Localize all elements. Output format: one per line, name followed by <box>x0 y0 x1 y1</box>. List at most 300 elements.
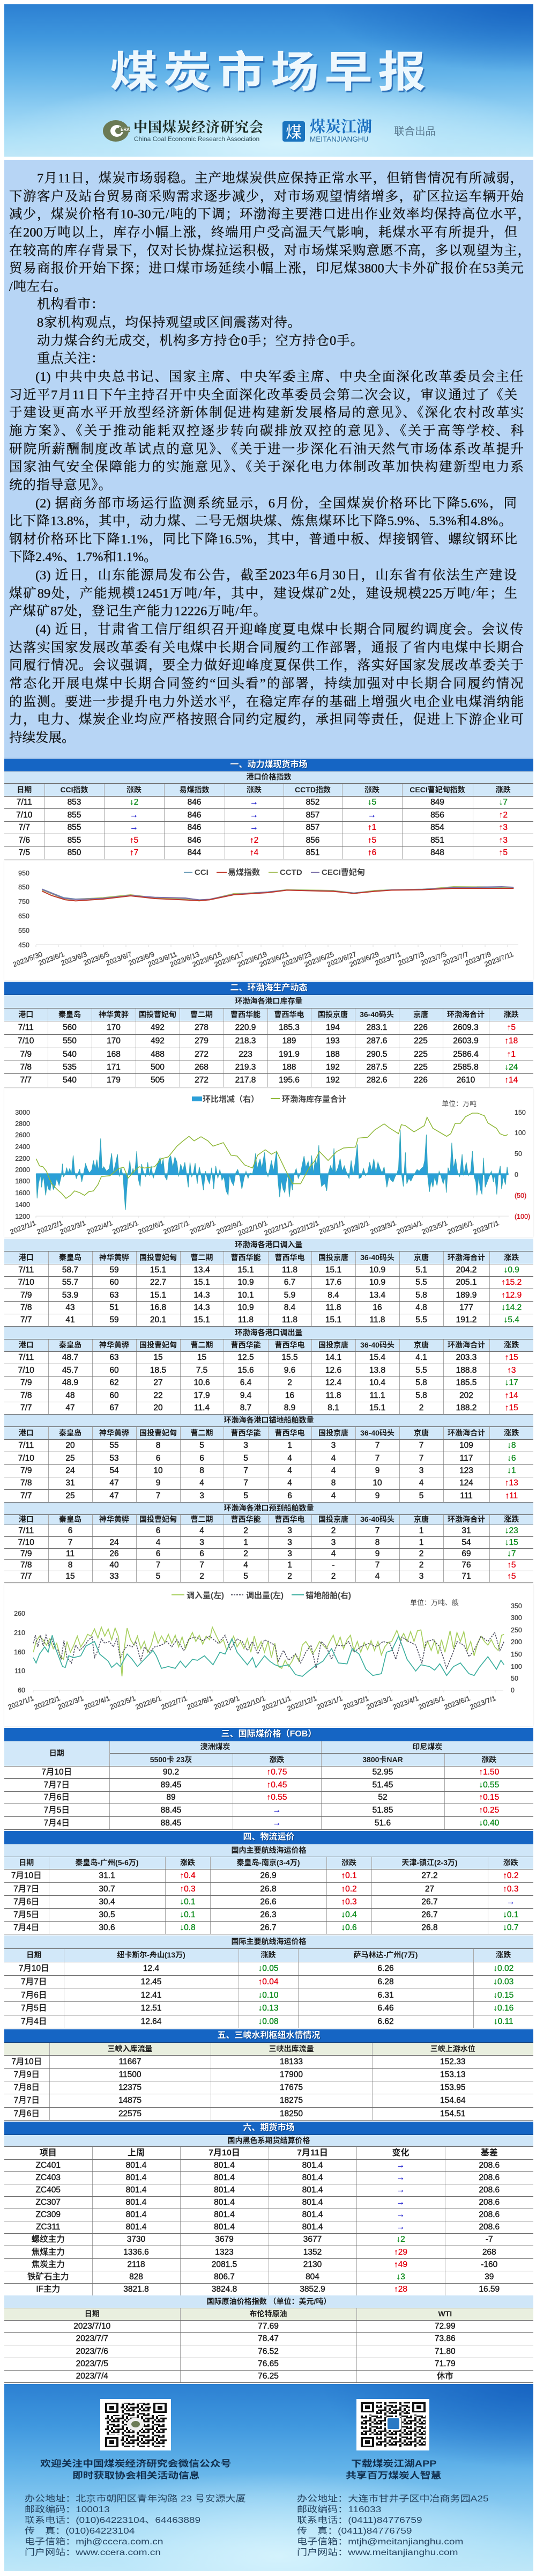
table: section 4 domestic freight rates: 涨跌 <box>180 1858 195 1867</box>
table: section 6 futures market settlement prices: 801.4 <box>126 2222 146 2232</box>
x axis date labels: 2023/6/19 <box>236 950 268 969</box>
table: section 4 domestic freight rates: ↑0.3 <box>503 1884 518 1894</box>
table: section 4 domestic freight rates: ↓0.1 <box>503 1910 518 1919</box>
y axis labels: 550 <box>18 927 29 934</box>
table: Bohai port inflow, outflow, anchored and expected ships: 3 <box>419 1572 423 1581</box>
x axis date labels: 2023/7/7 <box>441 950 470 967</box>
table: section 4 domestic freight rates: 7月6日 <box>13 1897 39 1907</box>
table: Bohai port inflow, outflow, anchored and expected ships: 4 <box>331 1549 336 1558</box>
right y axis labels: 100 <box>515 1129 526 1137</box>
table: section 2 Bohai port inventory: 36-40码头 <box>360 1010 394 1018</box>
x axis date labels: 2022/1/1 <box>6 1694 35 1711</box>
table: section 6 futures market settlement prices: 801.4 <box>126 2173 146 2182</box>
table: Bohai port inflow, outflow, anchored and expected ships: 4 <box>331 1466 336 1475</box>
table: section 1 thermal coal port price index: ↑3 <box>499 823 508 832</box>
table: section 6 futures market settlement prices: 铁矿石主力 <box>27 2272 69 2281</box>
table: section 1 thermal coal port price index: 852 <box>306 798 319 807</box>
table: section 4 domestic freight rates: ↑0.2 <box>503 1871 518 1880</box>
paragraph: key focus 2: 下降2.4%、1.7%和1.1%。 <box>9 550 157 564</box>
x axis date labels: 2022/6/1 <box>134 1694 162 1711</box>
table: Bohai port inflow, outflow, anchored and expected ships: 12.6 <box>325 1366 341 1374</box>
x axis date labels: 2022/10/1 <box>237 1219 269 1238</box>
table: Bohai port inflow, outflow, anchored and expected ships: 2 <box>199 1572 204 1581</box>
left y axis labels: 2200 <box>15 1155 30 1162</box>
table: section 2 Bohai port inventory: 2585.8 <box>453 1062 479 1072</box>
table: section 5 Three Gorges water conditions: 152.33 <box>440 2057 465 2066</box>
paragraph: institutional views: 8家机构观点，均保持观望或区间震荡对待。 <box>37 315 301 330</box>
table: section 6 futures market settlement prices: → <box>397 2198 405 2207</box>
table: section 4 domestic freight rates: 26.8 <box>421 1923 438 1932</box>
table: Bohai port inflow, outflow, anchored and expected ships: 2 <box>287 1378 292 1387</box>
table: Bohai port inflow, outflow, anchored and expected ships: 123 <box>459 1466 473 1475</box>
table: section 6 futures market settlement prices: ↑29 <box>394 2248 407 2256</box>
table: section 6 futures market settlement prices: ZC405 <box>35 2185 61 2195</box>
panel: market summary text <box>4 160 533 758</box>
table: section 1 thermal coal port price index: ↓5 <box>368 798 376 807</box>
table: international freight rates: ↓0.05 <box>258 1964 278 1973</box>
table: Bohai port inflow, outflow, anchored and expected ships: 曹西华电 <box>274 1515 304 1523</box>
table: Bohai port inflow, outflow, anchored and expected ships: 18.5 <box>150 1366 166 1374</box>
table: section 2 Bohai port inventory: 290.5 <box>367 1049 387 1059</box>
contact details: Meitan Jianghu: 办公地址：大连市甘井子区中冶商务园A25 <box>297 2494 489 2504</box>
table: Bohai port inflow, outflow, anchored and expected ships: 11.8 <box>238 1315 254 1324</box>
table: section 6 futures market settlement prices: ↓2 <box>396 2235 405 2244</box>
table: Bohai port inflow, outflow, anchored and expected ships: 5.5 <box>415 1315 427 1324</box>
left y axis labels <box>15 1109 30 1220</box>
table: Bohai port inflow, outflow, anchored and expected ships: 7 <box>419 1454 423 1462</box>
unit label: 单位：万吨、艘 <box>410 1599 459 1607</box>
table: Bohai port inflow, outflow, anchored and expected ships: 7/10 <box>18 1366 34 1374</box>
table: Bohai port inflow, outflow, anchored and expected ships: 曹二期 <box>191 1428 213 1437</box>
table: Bohai port inflow, outflow, anchored and expected ships: 神华黄骅 <box>99 1341 129 1349</box>
table: section 2 Bohai port inventory: 秦皇岛 <box>58 1010 81 1018</box>
table: international crude oil price index: WTI <box>438 2309 452 2318</box>
table: section 6 futures market settlement prices: 828 <box>129 2272 143 2281</box>
table: Bohai port inflow, outflow, anchored and expected ships: ↓7 <box>507 1549 516 1558</box>
table: Bohai port inflow, outflow, anchored and expected ships: 5 <box>243 1572 248 1581</box>
table: Bohai port inflow, outflow, anchored and expected ships: 36-40码头 <box>360 1253 394 1262</box>
table: Bohai port inflow, outflow, anchored and expected ships: 25 <box>65 1491 75 1500</box>
table: Bohai port inflow, outflow, anchored and expected ships: 9 <box>375 1549 379 1558</box>
table: section 2 Bohai port inventory: 272 <box>195 1076 209 1085</box>
left y axis labels: 60 <box>18 1687 25 1694</box>
table: section 4 domestic freight rates: 30.6 <box>99 1923 115 1932</box>
paragraph: market overview: 在200万吨以上，库存小幅上涨，终端用户受高温天气影响，耗煤水平有所提升，但 <box>9 225 517 240</box>
table: international crude oil price index: 76.65 <box>258 2359 279 2368</box>
table: section 6 futures market settlement prices: 801.4 <box>302 2161 323 2169</box>
x axis date labels: 2023/7/11 <box>483 950 515 968</box>
table: Bohai port inflow, outflow, anchored and expected ships: 环渤海各港口调出量 <box>235 1328 302 1337</box>
right y axis labels <box>511 1602 522 1694</box>
table: Bohai port inflow, outflow, anchored and expected ships: 31 <box>461 1526 471 1535</box>
table: section 6 futures market settlement prices: 上周 <box>128 2148 145 2158</box>
table: section 4 domestic freight rates: ↓0.8 <box>180 1923 196 1932</box>
table: Bohai port inflow, outflow, anchored and expected ships: 5.1 <box>415 1265 427 1275</box>
table: section 2 Bohai port inventory: 192 <box>326 1062 340 1072</box>
paragraph: key focus 4: (4) 近日，甘肃省工信厅组织召开迎峰度夏电煤中长期合同履约调度会。会议传 <box>35 622 523 637</box>
table: section 2 Bohai port inventory <box>4 982 533 1087</box>
table: Bohai port inflow, outflow, anchored and expected ships: 22 <box>153 1390 163 1400</box>
table: Bohai port inflow, outflow, anchored and expected ships: 6 <box>68 1526 72 1535</box>
table: section 2 Bohai port inventory: 226 <box>414 1076 428 1085</box>
table: Bohai port inflow, outflow, anchored and expected ships: 国投京唐 <box>318 1515 348 1523</box>
table: international freight rates: ↓0.10 <box>258 1990 278 2000</box>
table: section 3 international coal price FOB: 7月5日 <box>44 1806 70 1814</box>
table: section 1 thermal coal port price index: 853 <box>68 798 81 807</box>
table: Bohai port inflow, outflow, anchored and expected ships: 6 <box>199 1454 204 1462</box>
table: Bohai port inflow, outflow, anchored and expected ships: 189.9 <box>456 1291 477 1299</box>
table: section 2 Bohai port inventory: 2586.4 <box>453 1049 479 1059</box>
table: Bohai port inflow, outflow, anchored and expected ships: 55 <box>109 1441 119 1450</box>
table: international freight rates: 7月6日 <box>21 1990 47 2000</box>
table: section 1 thermal coal port price index: → <box>250 798 258 807</box>
table: Bohai port inflow, outflow, anchored and expected ships: 10.9 <box>237 1303 254 1312</box>
table: section 4 domestic freight rates: 26.3 <box>260 1910 277 1919</box>
paragraph: key focus 1: 研院所薪酬制度改革试点的意见》、《关于进一步深化石油天然气市场体系改革提升 <box>9 442 524 457</box>
table: section 4 domestic freight rates: 天津-镇江(2-3万) <box>401 1858 458 1867</box>
table: Bohai port inflow, outflow, anchored and expected ships: 曹西华能 <box>230 1428 260 1437</box>
table: Bohai port inflow, outflow, anchored and expected ships: 10.9 <box>369 1265 385 1275</box>
table: Bohai port inflow, outflow, anchored and expected ships: 神华黄骅 <box>99 1515 129 1523</box>
table: section 3 international coal price FOB: 三、国际煤价格（FOB） <box>221 1729 316 1739</box>
table: Bohai port inflow, outflow, anchored and expected ships: 7/7 <box>20 1315 32 1324</box>
table: international freight rates: ↑0.04 <box>258 1977 278 1986</box>
table: Bohai port inflow, outflow, anchored and expected ships: 17.6 <box>325 1278 341 1287</box>
y axis labels: 950 <box>18 870 29 877</box>
table: Bohai port inflow, outflow, anchored and expected ships: 3 <box>287 1537 292 1547</box>
table: Bohai port inflow, outflow, anchored and expected ships: 7/10 <box>18 1537 34 1547</box>
table: section 6 futures market settlement prices: 268 <box>482 2248 496 2256</box>
table: Bohai port inflow, outflow, anchored and expected ships: 15.1 <box>237 1265 254 1275</box>
table: Bohai port inflow, outflow, anchored and expected ships: 31 <box>65 1478 75 1488</box>
table: Bohai port inflow, outflow, anchored and expected ships: 4 <box>243 1561 248 1570</box>
table: section 6 futures market settlement prices: → <box>397 2185 405 2195</box>
table: section 2 Bohai port inventory: 550 <box>63 1036 77 1046</box>
table: section 2 Bohai port inventory: 560 <box>63 1023 77 1032</box>
table: Bohai port inflow, outflow, anchored and expected ships: 47 <box>109 1478 119 1488</box>
table: section 1 thermal coal port price index: 涨跌 <box>364 785 379 794</box>
table: Bohai port inflow, outflow, anchored and expected ships: 8 <box>375 1537 379 1547</box>
footer message: CCERA: 欢迎关注中国煤炭经济研究会微信公众号 <box>40 2459 231 2469</box>
x axis date labels: 2022/2/1 <box>35 1219 64 1236</box>
table: Bohai port inflow, outflow, anchored and expected ships: 7/10 <box>18 1278 34 1287</box>
table: Bohai port inflow, outflow, anchored and expected ships: 17.9 <box>193 1390 210 1400</box>
table: international freight rates: 12.64 <box>141 2017 161 2026</box>
contact details: Meitan Jianghu <box>297 2494 489 2557</box>
daily change area and inventory line <box>36 1113 509 1210</box>
table: section 3 international coal price FOB: 日期 <box>49 1749 64 1757</box>
table: Bohai port inflow, outflow, anchored and expected ships: 58.7 <box>62 1265 78 1275</box>
table: Bohai port inflow, outflow, anchored and expected ships: 曹西华能 <box>230 1253 260 1262</box>
table: section 4 domestic freight rates: → <box>507 1897 515 1907</box>
table: Bohai port inflow, outflow, anchored and expected ships: 7/9 <box>20 1378 32 1387</box>
paragraph: key focus 3: (3) 近日，山东能源局发布公告，截至2023年6月30日，山东省有依法生产建设 <box>35 568 517 583</box>
paragraph: market overview <box>9 171 531 294</box>
table: Bohai port inflow, outflow, anchored and expected ships: 4 <box>331 1454 336 1462</box>
table: Bohai port inflow, outflow, anchored and expected ships: 20 <box>65 1441 75 1450</box>
table: section 2 Bohai port inventory: 540 <box>63 1049 77 1059</box>
contact details: CCERA: 门户网站：www.ccera.com.cn <box>25 2548 161 2557</box>
chart legend: CCTD <box>280 868 302 877</box>
table: section 1 thermal coal port price index: 857 <box>306 823 319 832</box>
table: Bohai port inflow, outflow, anchored and expected ships: 5.8 <box>415 1291 427 1299</box>
table: section 6 futures market settlement prices: → <box>397 2210 405 2219</box>
table: section 3 international coal price FOB: 90.2 <box>163 1768 179 1777</box>
x axis date labels: 2023/1/1 <box>317 1219 346 1236</box>
table: Bohai port inflow, outflow, anchored and expected ships: 涨跌 <box>504 1253 519 1262</box>
x axis date labels: 2022/8/1 <box>185 1694 214 1711</box>
table: international crude oil price index: 73.86 <box>435 2334 456 2343</box>
table: section 6 futures market settlement prices: 2081.5 <box>212 2260 237 2269</box>
table: section 6 futures market settlement prices: IF主力 <box>36 2285 60 2294</box>
table: Bohai port inflow, outflow, anchored and expected ships: 8.1 <box>327 1403 339 1412</box>
x axis date labels: 2022/11/1 <box>261 1694 292 1712</box>
table: Bohai port inflow, outflow, anchored and expected ships: 10 <box>153 1466 163 1475</box>
table: Bohai port inflow, outflow, anchored and expected ships: 4 <box>287 1478 292 1488</box>
table: section 6 futures market settlement prices: 801.4 <box>302 2222 323 2232</box>
table: Bohai port inflow, outflow, anchored and expected ships: 秦皇岛 <box>59 1341 81 1349</box>
table: section 3 international coal price FOB: ↓0.55 <box>479 1780 499 1790</box>
table: section 5 Three Gorges water conditions: 153.95 <box>440 2082 465 2092</box>
unit label: 单位：万吨 <box>442 1100 477 1108</box>
table: section 2 Bohai port inventory: 7/7 <box>20 1076 32 1085</box>
table: section 2 Bohai port inventory: 195.6 <box>279 1076 300 1085</box>
y axis labels: 850 <box>18 884 29 891</box>
chart legend: 易煤指数 <box>228 867 260 877</box>
title: 煤炭市场早报 <box>110 38 431 100</box>
table: section 1 thermal coal port price index: 851 <box>306 848 319 857</box>
table: Bohai port inflow, outflow, anchored and expected ships: 10.6 <box>193 1378 210 1387</box>
inflow, outflow and anchored ship lines <box>33 1627 504 1676</box>
table: international freight rates: ↓0.16 <box>493 2004 513 2013</box>
table: section 3 international coal price FOB: 89.45 <box>161 1780 181 1790</box>
right y axis labels: 250 <box>511 1626 522 1634</box>
left y axis labels: 1200 <box>15 1213 30 1220</box>
x axis date labels <box>12 950 515 969</box>
table: Bohai port inflow, outflow, anchored and expected ships: 环渤海各港口预到船舶数量 <box>224 1504 314 1512</box>
table: section 1 thermal coal port price index: CECI曹妃甸指数 <box>410 785 465 794</box>
table: section 4 domestic freight rates: 30.7 <box>99 1884 115 1894</box>
table: Bohai port inflow, outflow, anchored and expected ships: 15.1 <box>150 1291 166 1299</box>
table: section 1 thermal coal port price index: ↑5 <box>499 848 508 857</box>
table: Bohai port inflow, outflow, anchored and expected ships: 5 <box>419 1491 423 1500</box>
table: Bohai port inflow, outflow, anchored and expected ships: 5 <box>156 1572 160 1581</box>
table: international freight rates: ↓0.03 <box>493 1977 513 1986</box>
table: section 2 Bohai port inventory: 500 <box>151 1062 165 1072</box>
x axis date labels: 2023/6/1 <box>443 1694 471 1711</box>
table: section 6 futures market settlement prices: ZC311 <box>36 2222 60 2232</box>
table: section 4 domestic freight rates: 涨跌 <box>503 1858 518 1867</box>
table: Bohai port inflow, outflow, anchored and expected ships: 2 <box>243 1549 248 1558</box>
y axis labels: 750 <box>18 898 29 906</box>
x axis date labels: 2022/5/1 <box>108 1694 137 1711</box>
table: international freight rates: 12.4 <box>143 1964 159 1973</box>
table: Bohai port inflow, outflow, anchored and expected ships: 59 <box>109 1315 119 1324</box>
table: Bohai port inflow, outflow, anchored and expected ships: 7 <box>156 1491 160 1500</box>
table: section 5 Three Gorges water conditions: 18133 <box>280 2057 303 2066</box>
x axis date labels: 2023/3/1 <box>365 1694 393 1711</box>
table: Bohai port inflow, outflow, anchored and expected ships: 4 <box>287 1466 292 1475</box>
table: section 2 Bohai port inventory: 218.3 <box>235 1036 256 1046</box>
table: Bohai port inflow, outflow, anchored and expected ships: 5.8 <box>415 1378 427 1387</box>
paragraph: market overview: 下游客户及站台贸易商采购需求逐步减少，对市场观望情绪增多，矿区拉运车辆开始 <box>9 189 524 204</box>
left y axis labels: 160 <box>14 1648 25 1656</box>
table: section 2 Bohai port inventory: 二、环渤海生产动态 <box>230 983 308 992</box>
logo: China Coal Economic Research Association: 中国煤炭经济研究会 <box>133 120 264 135</box>
table: section 1 thermal coal port price index: CCI指数 <box>60 785 88 794</box>
table: Bohai port inflow, outflow, anchored and expected ships: 涨跌 <box>504 1341 519 1349</box>
table: section 6 futures market settlement prices: 208.6 <box>479 2210 500 2219</box>
table: Bohai port inflow, outflow, anchored and expected ships: 188.8 <box>456 1366 477 1374</box>
table: section 6 futures market settlement prices: 806.7 <box>214 2272 235 2281</box>
table: section 3 international coal price FOB: ↑0.55 <box>267 1793 287 1802</box>
table: Bohai port inflow, outflow, anchored and expected ships: 13.4 <box>193 1265 210 1275</box>
table: section 3 international coal price FOB: ↑1.50 <box>479 1768 499 1777</box>
contact details: CCERA: 传 真：(010)64223104 <box>25 2527 135 2536</box>
table: section 2 Bohai port inventory: 488 <box>151 1049 165 1059</box>
x axis date labels: 2023/6/23 <box>281 950 312 969</box>
table: Bohai port inflow, outflow, anchored and expected ships: 22.7 <box>150 1278 166 1287</box>
table: section 1 thermal coal port price index: ↑3 <box>499 836 508 844</box>
table: international crude oil price index: 76.52 <box>258 2346 279 2356</box>
table: Bohai port inflow, outflow, anchored and expected ships: 6 <box>156 1454 160 1462</box>
table: international freight rates: 12.41 <box>141 1990 161 2000</box>
table: Bohai port inflow, outflow, anchored and expected ships: 191.2 <box>456 1315 477 1324</box>
footer message: Meitan Jianghu <box>346 2459 441 2481</box>
table: section 6 futures market settlement prices: 变化 <box>392 2148 410 2158</box>
table: section 3 international coal price FOB: 涨跌 <box>269 1755 284 1764</box>
table: section 6 futures market settlement prices: 801.4 <box>126 2161 146 2169</box>
table: Bohai port inflow, outflow, anchored and expected ships: 24 <box>65 1466 75 1475</box>
table: Bohai port inflow, outflow, anchored and expected ships: 4 <box>199 1526 204 1535</box>
table: international freight rates: 萨马林达-广州(7万) <box>354 1951 418 1959</box>
table: section 1 thermal coal port price index: 7/7 <box>18 823 30 832</box>
table: Bohai port inflow, outflow, anchored and expected ships: 27 <box>153 1378 163 1387</box>
table: section 4 domestic freight rates: ↓0.4 <box>341 1910 357 1919</box>
table: section 2 Bohai port inventory: 226 <box>414 1023 428 1032</box>
table: section 6 futures market settlement prices: 801.4 <box>302 2173 323 2182</box>
table: section 3 international coal price FOB: ↑0.25 <box>479 1806 499 1814</box>
table: Bohai port inflow, outflow, anchored and expected ships: 3 <box>199 1491 204 1500</box>
x axis date labels: 2023/6/11 <box>147 950 178 968</box>
table: Bohai port inflow, outflow, anchored and expected ships: 11.4 <box>194 1403 210 1412</box>
table: section 6 futures market settlement prices: 3852.9 <box>300 2285 325 2294</box>
table: Bohai port inflow, outflow, anchored and expected ships: 9 <box>375 1466 379 1475</box>
paragraph: key focus 2: 比下降13.8%，其中，动力煤、二号无烟块煤、炼焦煤环比下降5.9%、5.3%和4.8%。 <box>9 514 512 528</box>
table: section 2 Bohai port inventory: 国投京唐 <box>318 1010 348 1018</box>
x axis date labels <box>9 1219 500 1238</box>
table: section 2 Bohai port inventory: 188 <box>282 1062 296 1072</box>
table: Bohai port inflow, outflow, anchored and expected ships: 4.8 <box>415 1303 427 1312</box>
table: section 1 thermal coal port price index: 846 <box>188 836 201 844</box>
table: section 4 domestic freight rates: 27.2 <box>421 1871 438 1880</box>
table: section 2 Bohai port inventory: 170 <box>107 1023 121 1032</box>
table: section 4 domestic freight rates: 26.7 <box>421 1910 438 1919</box>
table: Bohai port inflow, outflow, anchored and expected ships: 5 <box>243 1454 248 1462</box>
table: section 3 international coal price FOB: → <box>273 1819 281 1827</box>
table: section 2 Bohai port inventory: 曹二期 <box>190 1010 213 1018</box>
table: section 1 thermal coal port price index: → <box>130 810 138 820</box>
table: Bohai port inflow, outflow, anchored and expected ships: - <box>332 1561 335 1570</box>
table: international freight rates: 7月4日 <box>21 2017 47 2026</box>
table: section 6 futures market settlement prices: 1323 <box>215 2248 234 2256</box>
table: Bohai port inflow, outflow, anchored and expected ships: 36-40码头 <box>360 1515 394 1523</box>
right y axis labels: 350 <box>511 1602 522 1610</box>
paragraph: key focus 4: 力，电力、煤炭企业均应严格按照合同约定履约，承担同等责任，促进上下游企业可 <box>9 712 524 727</box>
table: section 2 Bohai port inventory: 168 <box>107 1049 121 1059</box>
table: Bohai port inflow, outflow, anchored and expected ships: 204.2 <box>456 1265 477 1275</box>
x axis date labels: 2023/6/17 <box>213 950 245 969</box>
table: section 3 international coal price FOB: 3800卡NAR <box>362 1755 403 1764</box>
table: international freight rates: 7月7日 <box>21 1977 47 1986</box>
table: section 4 domestic freight rates: 7月4日 <box>13 1923 39 1932</box>
table: international freight rates: ↓0.13 <box>258 2004 278 2013</box>
table: section 4 domestic freight rates: 四、物流运价 <box>243 1832 295 1842</box>
table: section 6 futures market settlement prices: 基差 <box>481 2148 498 2158</box>
table: Bohai port inflow, outflow, anchored and expected ships: 177 <box>459 1303 473 1312</box>
table: section 2 Bohai port inventory: 287.5 <box>367 1062 387 1072</box>
x axis date labels: 2023/5/1 <box>420 1219 449 1236</box>
table: section 5 Three Gorges water conditions: 18275 <box>280 2096 303 2105</box>
table: Bohai port inflow, outflow, anchored and expected ships: ↓5.4 <box>504 1315 519 1324</box>
table: Bohai port inflow, outflow, anchored and expected ships: 1 <box>287 1561 292 1570</box>
table: international crude oil price index: 78.47 <box>258 2334 279 2343</box>
table: section 6 futures market settlement prices: 801.4 <box>126 2210 146 2219</box>
table: section 6 futures market settlement prices: 7月10日 <box>209 2148 240 2158</box>
table: Bohai port inflow, outflow, anchored and expected ships: 47 <box>65 1403 75 1412</box>
table: Bohai port inflow, outflow, anchored and expected ships: 10 <box>373 1478 382 1488</box>
table: section 6 futures market settlement prices: ↓3 <box>396 2272 405 2281</box>
x axis date labels: 2022/9/1 <box>215 1219 243 1236</box>
x axis date labels: 2023/6/3 <box>59 950 88 967</box>
table: international crude oil price index: 77.69 <box>258 2322 279 2331</box>
table: section 1 thermal coal port price index: 856 <box>306 836 319 844</box>
table: Bohai port inflow, outflow, anchored and expected ships: 10.4 <box>369 1378 385 1387</box>
x axis date labels: 2023/5/30 <box>12 950 43 969</box>
table: international freight rates: 涨跌 <box>260 1951 276 1959</box>
table: Bohai port inflow, outflow, anchored and expected ships: 7 <box>375 1441 379 1450</box>
table: Bohai port inflow, outflow, anchored and expected ships: 67 <box>109 1403 119 1412</box>
table: Bohai port inflow, outflow, anchored and expected ships: 16 <box>373 1303 382 1312</box>
logo: Meitan Jianghu: MEITANJIANGHU <box>310 135 368 143</box>
x axis date labels: 2022/12/1 <box>286 1694 318 1713</box>
left y axis labels: 2400 <box>15 1143 30 1151</box>
table: section 6 futures market settlement prices: ↑28 <box>394 2285 407 2294</box>
table: section 6 futures market settlement prices: ↑49 <box>394 2260 407 2269</box>
table: Bohai port inflow, outflow, anchored and expected ships: 12.4 <box>325 1378 341 1387</box>
table: Bohai port inflow, outflow, anchored and expected ships: 25 <box>65 1454 75 1462</box>
table: Bohai port inflow, outflow, anchored and expected ships: ↓1 <box>507 1466 516 1475</box>
table: section 1 thermal coal port price index: ↑4 <box>250 848 258 857</box>
table: section 2 Bohai port inventory: 京唐 <box>413 1010 428 1018</box>
table: section 1 thermal coal port price index: → <box>250 823 258 832</box>
table: Bohai port inflow, outflow, anchored and expected ships: 5.5 <box>415 1278 427 1287</box>
table: Bohai port inflow, outflow, anchored and expected ships: 185.5 <box>456 1378 477 1387</box>
joint production note: 联合出品 <box>394 126 436 137</box>
table: section 2 Bohai port inventory: ↑5 <box>507 1023 516 1032</box>
table: section 3 international coal price FOB: 89 <box>166 1793 176 1802</box>
table: section 4 domestic freight rates: 26.6 <box>260 1897 277 1907</box>
table: Bohai port inflow, outflow, anchored and expected ships: ↑5 <box>507 1572 516 1581</box>
table: Bohai port inflow, outflow, anchored and expected ships: 3 <box>243 1441 248 1450</box>
table: section 6 futures market settlement prices: → <box>397 2161 405 2169</box>
contact details: CCERA: 电子信箱：mjh@ccera.com.cn <box>25 2537 163 2546</box>
x axis date labels: 2023/6/21 <box>258 950 290 969</box>
table: Bohai port inflow, outflow, anchored and expected ships: 5.5 <box>415 1366 427 1374</box>
table: international freight rates: 6.26 <box>377 1964 394 1973</box>
table: international crude oil price index: 2023/7/7 <box>76 2334 108 2343</box>
table: Bohai port inflow, outflow, anchored and expected ships: 曹二期 <box>191 1341 213 1349</box>
